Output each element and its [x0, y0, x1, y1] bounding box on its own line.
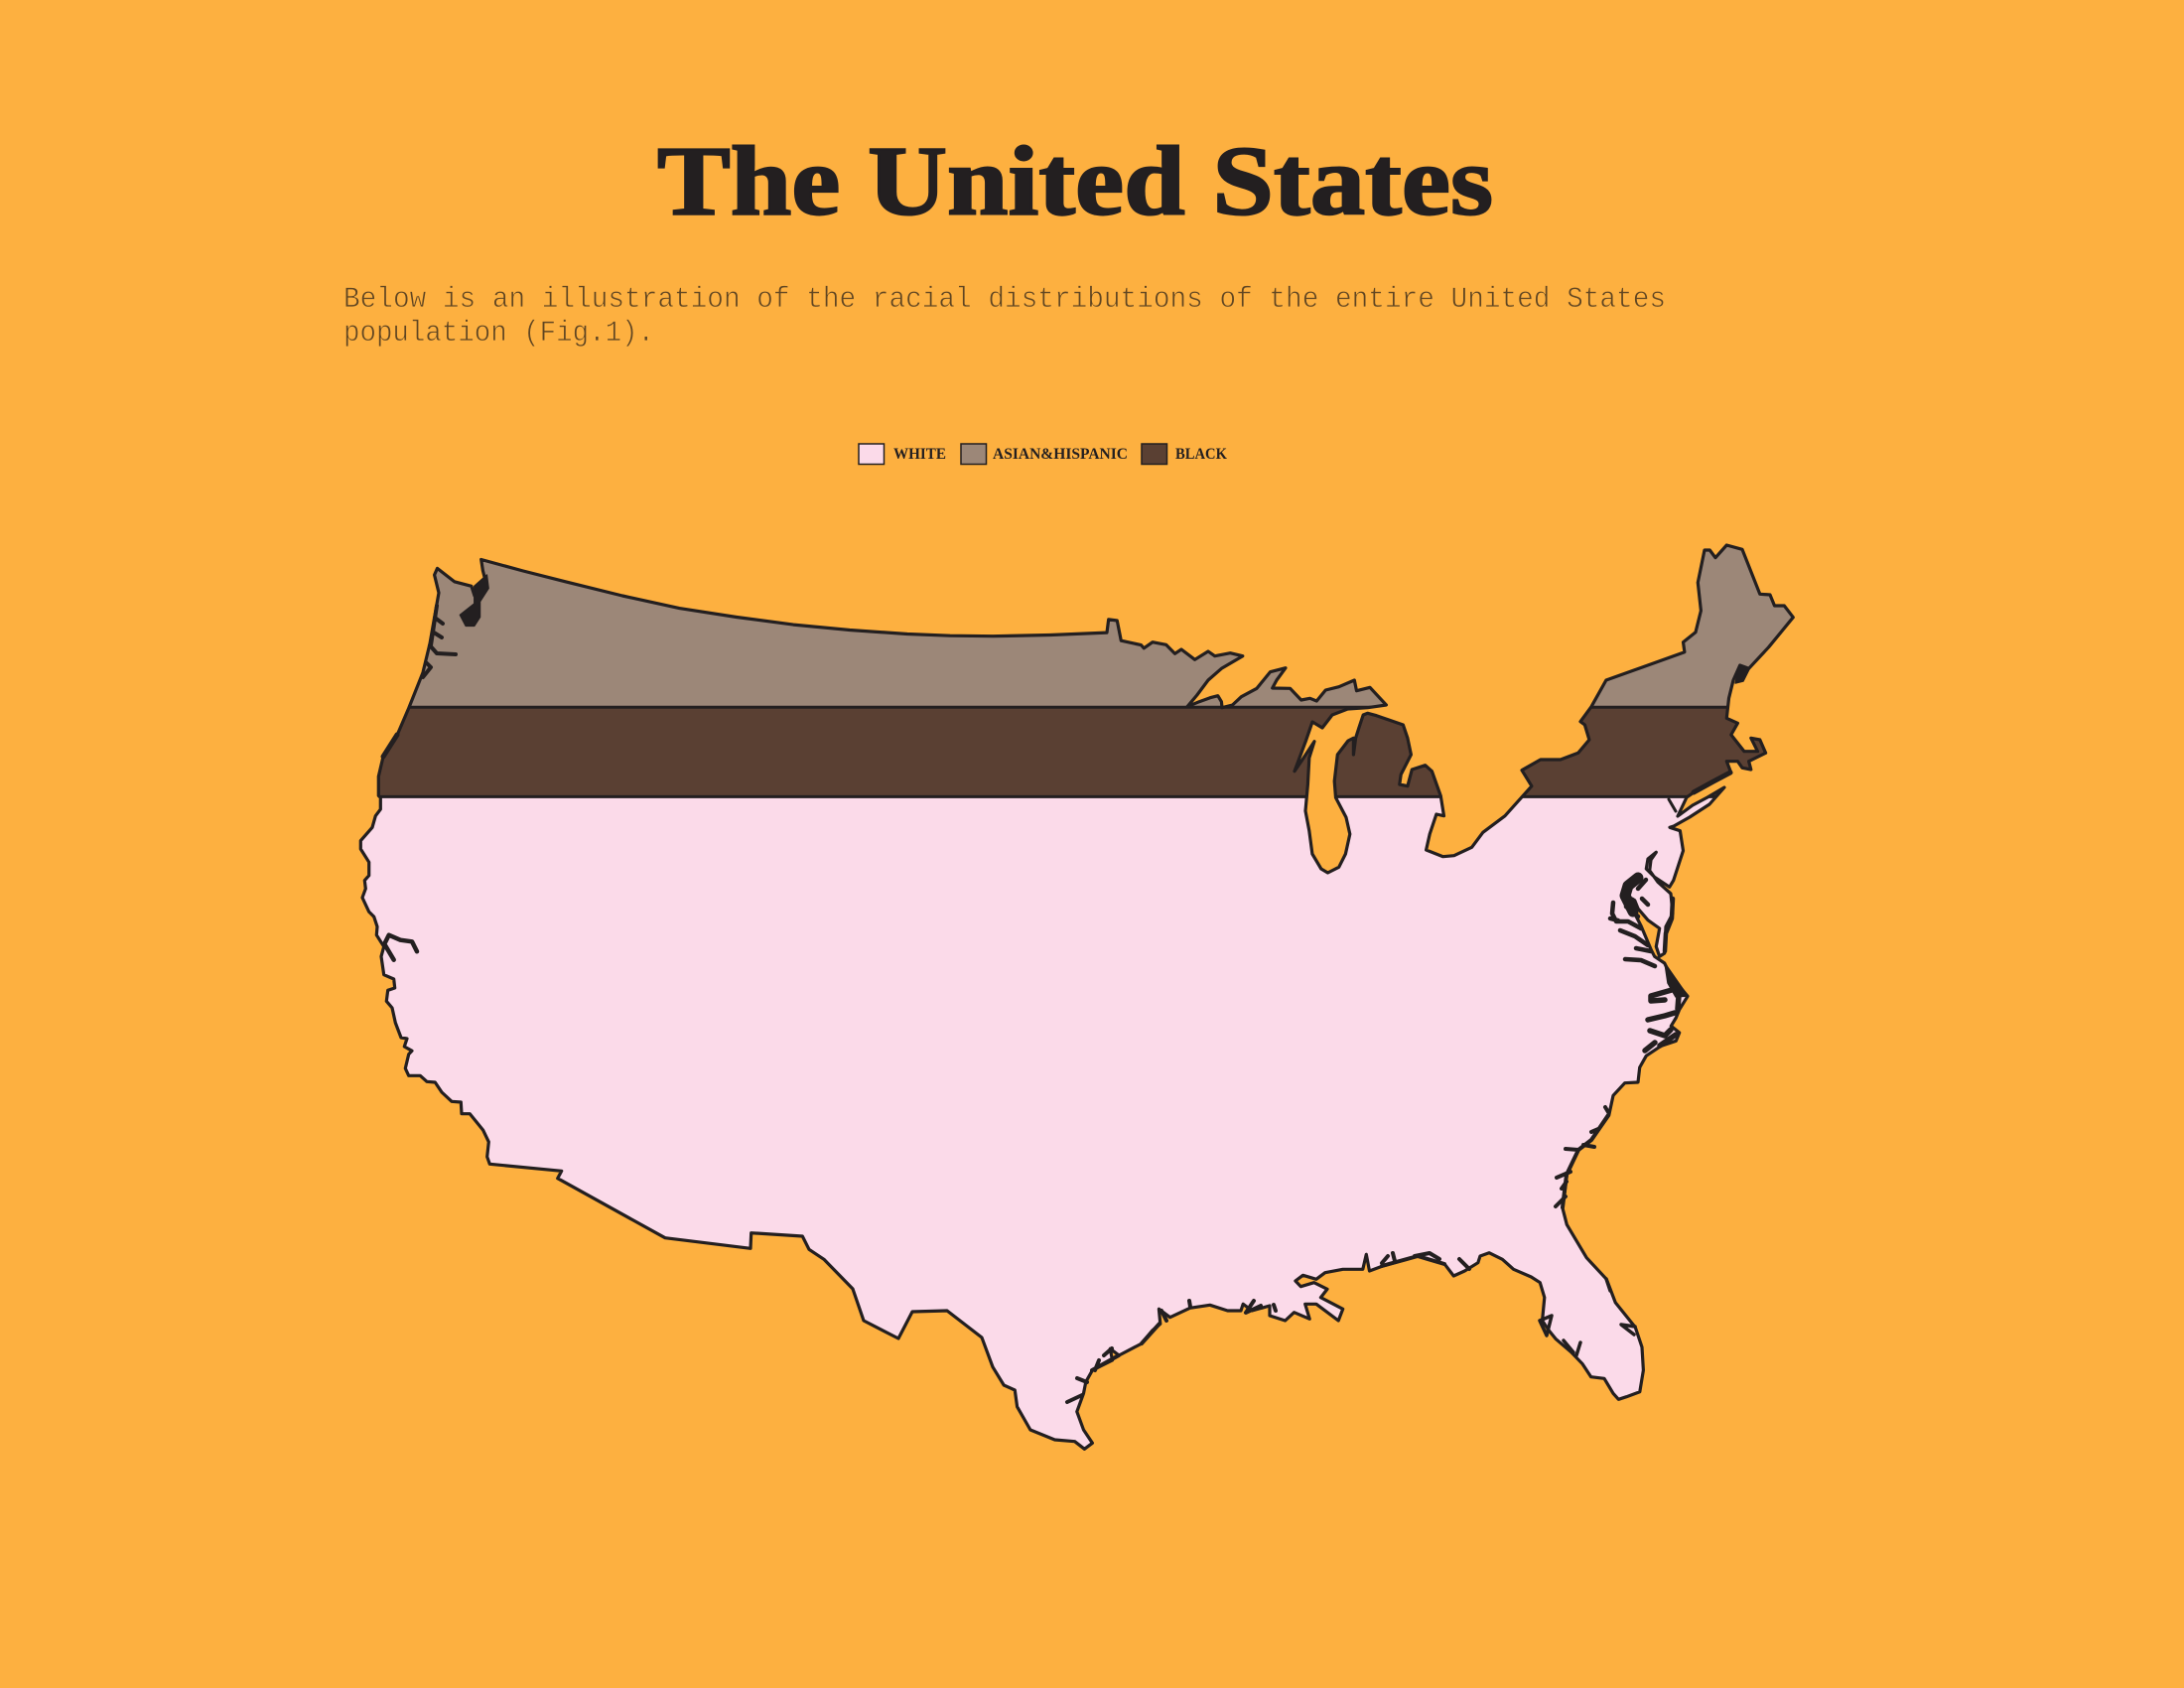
- intro text: population (Fig.1).: [343, 317, 654, 351]
- Penobscot Bay: [1735, 665, 1749, 683]
- Outer Banks wedge: [1665, 963, 1688, 997]
- Florida inlets: [1540, 1279, 1635, 1355]
- title: The United States: [657, 125, 1493, 236]
- legend: [859, 444, 1227, 465]
- North Carolina sounds: [1645, 990, 1679, 1051]
- Puget Sound: [460, 575, 488, 626]
- coastline details: [383, 575, 1749, 1402]
- intro text: Below is an illustration of the racial distributions of the entire United States: [343, 283, 1666, 317]
- legend item: white: [859, 444, 946, 465]
- legend item: asian and hispanic: ASIAN&HISPANIC: [993, 446, 1128, 463]
- Hudson River: [1669, 799, 1676, 811]
- infographic canvas: [345, 145, 1795, 1451]
- legend item: black: BLACK: [1175, 446, 1227, 463]
- legend item: white: WHITE: [893, 446, 946, 463]
- New England south coast: [1694, 773, 1730, 792]
- San Francisco Bay: [384, 935, 417, 960]
- legend item: black: [1142, 444, 1227, 465]
- intro text: [343, 283, 1666, 351]
- legend item: asian and hispanic: [961, 444, 1128, 465]
- map outline: [360, 545, 1793, 1449]
- Washington bays: [423, 606, 456, 677]
- band: white: [361, 798, 1713, 1447]
- Chesapeake rivers: [1610, 880, 1655, 966]
- map bands clipped to land: [338, 526, 1827, 1472]
- Oregon coast: [383, 735, 397, 757]
- Delmarva coast: [1665, 899, 1673, 951]
- band: asian and hispanic: [411, 547, 1791, 706]
- map of the United States: [338, 526, 1827, 1472]
- Georgia and Carolina marshes: [1556, 1107, 1608, 1207]
- Chesapeake upper bay: [1625, 878, 1638, 912]
- Gulf coast marshes: [1067, 1253, 1469, 1402]
- band: black: [379, 709, 1763, 795]
